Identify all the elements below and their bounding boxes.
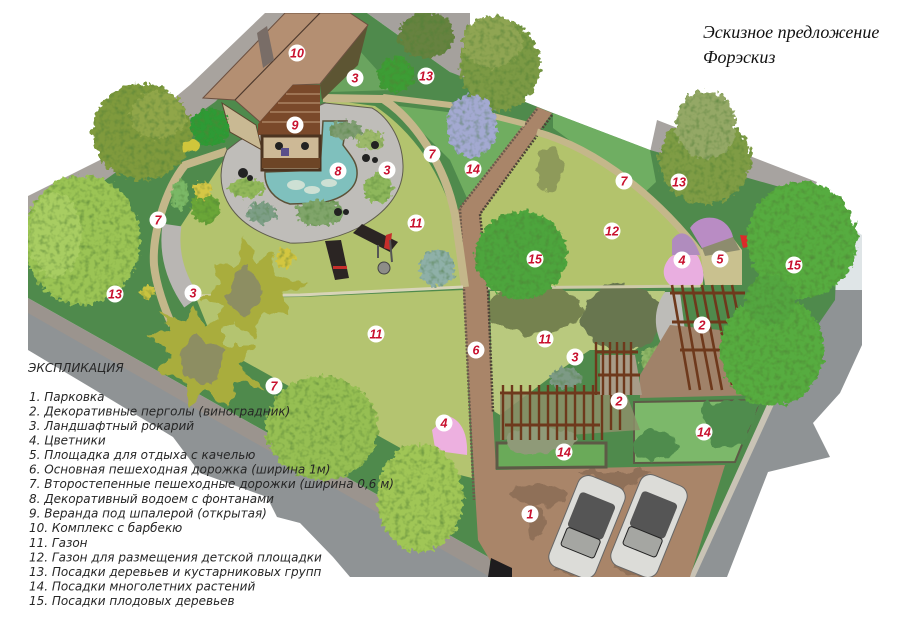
legend: 11. Газон bbox=[29, 536, 88, 550]
car right bbox=[607, 471, 691, 581]
veranda 9 bbox=[258, 85, 320, 170]
legend: 13. Посадки деревьев и кустарниковых групп bbox=[29, 565, 322, 579]
bush: green bbox=[191, 108, 229, 146]
title: Эскизное предложение bbox=[703, 22, 879, 42]
bushes: maple side bbox=[141, 248, 295, 299]
house dark side bbox=[320, 25, 368, 100]
tree: maple bbox=[147, 235, 310, 410]
water lilies bbox=[287, 179, 337, 194]
number markers: 3 bbox=[352, 72, 359, 86]
tree: lower right bbox=[377, 444, 463, 552]
path edging bbox=[460, 109, 552, 500]
number markers: 9 bbox=[292, 118, 299, 132]
legend: 6. Основная пешеходная дорожка (ширина 1м) bbox=[29, 462, 330, 476]
legend: 1. Парковка bbox=[29, 390, 105, 404]
rock garden paving bbox=[221, 103, 403, 243]
plant by rockery 3 bbox=[550, 367, 582, 389]
wall: upper left boundary bbox=[28, 13, 284, 216]
number markers: 7 bbox=[271, 380, 279, 394]
number markers: 6 bbox=[473, 344, 481, 358]
tree shadows on lawn bbox=[487, 148, 662, 352]
gate bbox=[488, 558, 512, 577]
number markers: 11 bbox=[410, 216, 423, 230]
legend bbox=[27, 361, 394, 608]
number markers: 7 bbox=[155, 214, 163, 228]
tree 15 centre bbox=[475, 211, 567, 299]
panel: lawn 11 lower bbox=[196, 290, 472, 478]
wall: lower left boundary bbox=[28, 298, 490, 577]
chimney bbox=[257, 26, 274, 68]
number markers: 7 bbox=[429, 148, 437, 162]
legend: 7. Второстепенные пешеходные дорожки (ширина 0,6 м) bbox=[29, 477, 394, 491]
number markers: 15 bbox=[528, 252, 543, 266]
main path 6 bbox=[458, 107, 725, 577]
roof 10 bbox=[203, 13, 368, 122]
number markers: 13 bbox=[419, 70, 433, 84]
legend: 10. Комплекс с барбекю bbox=[29, 521, 182, 535]
number markers: 7 bbox=[621, 174, 629, 188]
legend: 15. Посадки плодовых деревьев bbox=[29, 594, 235, 608]
number markers: 2 bbox=[615, 394, 623, 408]
cast shadow lower left bbox=[28, 306, 490, 577]
bed 14 right bbox=[633, 400, 760, 463]
panel: lawn 11 right bbox=[490, 291, 665, 415]
number markers: 14 bbox=[557, 446, 571, 460]
number markers: 11 bbox=[539, 332, 552, 346]
tree: left bbox=[24, 175, 140, 305]
tree: lower centre bbox=[266, 376, 378, 480]
pergola 2 right bbox=[670, 285, 752, 390]
roof ridge bbox=[235, 13, 320, 100]
number markers: 13 bbox=[108, 288, 122, 302]
road kerb bbox=[690, 405, 774, 577]
pergola 2 centre bbox=[595, 342, 642, 395]
house side wall bbox=[222, 103, 262, 150]
number markers: 13 bbox=[672, 176, 686, 190]
secondary paths 7 bbox=[154, 97, 702, 325]
black accents bbox=[238, 141, 379, 216]
wall: right boundary bbox=[650, 120, 817, 186]
legend: 8. Декоративный водоем с фонтанами bbox=[29, 492, 274, 506]
number markers: 1 bbox=[527, 508, 534, 522]
wall: upper right boundary bbox=[367, 13, 470, 82]
legend: 4. Цветники bbox=[29, 434, 106, 448]
number markers: 14 bbox=[466, 162, 480, 176]
bush: yellow bbox=[184, 138, 200, 154]
swing table bbox=[378, 240, 392, 274]
pergola 2 lower bbox=[500, 385, 640, 454]
number markers: 4 bbox=[440, 416, 448, 430]
number markers: 3 bbox=[572, 350, 579, 364]
tree: top left willow bbox=[92, 84, 192, 180]
title bbox=[703, 22, 879, 67]
bed 14 left bbox=[497, 443, 606, 468]
legend: 14. Посадки многолетних растений bbox=[29, 580, 255, 594]
number markers: 4 bbox=[678, 254, 686, 268]
pond 8 bbox=[265, 121, 357, 204]
flower beds 4 bbox=[432, 218, 733, 455]
panel: lawn 11 upper bbox=[172, 100, 466, 296]
car left bbox=[545, 472, 629, 582]
number markers: 10 bbox=[290, 46, 304, 60]
panel: light green beds bbox=[330, 52, 656, 198]
panel: lawn 12 bbox=[480, 135, 703, 287]
bush: grey blue bbox=[419, 250, 455, 286]
tree: right willow bbox=[659, 91, 751, 204]
tree: top dark bbox=[398, 12, 454, 58]
number markers: 12 bbox=[605, 224, 619, 238]
number markers: 5 bbox=[717, 252, 725, 266]
legend: 2. Декоративные перголы (виноградник) bbox=[29, 404, 290, 418]
number markers: 15 bbox=[787, 258, 802, 272]
number markers bbox=[106, 44, 802, 522]
bush: top green bbox=[378, 57, 414, 93]
rock garden right bbox=[638, 292, 684, 368]
legend: ЭКСПЛИКАЦИЯ bbox=[27, 361, 124, 375]
number markers: 3 bbox=[384, 164, 391, 178]
bushes: left walkway bbox=[172, 179, 220, 223]
title: Форэскиз bbox=[703, 47, 775, 67]
number markers: 14 bbox=[697, 426, 711, 440]
grey walkway bbox=[171, 225, 192, 302]
number markers: 11 bbox=[370, 328, 383, 342]
ground under pergolas bbox=[640, 325, 742, 398]
legend: 3. Ландшафтный рокарий bbox=[29, 419, 194, 433]
parking shadows bbox=[512, 470, 650, 577]
number markers: 3 bbox=[190, 286, 197, 300]
legend: 9. Веранда под шпалерой (открытая) bbox=[29, 506, 267, 520]
playground 5 bbox=[700, 235, 752, 285]
number markers: 8 bbox=[335, 164, 342, 178]
legend: 12. Газон для размещения детской площадки bbox=[29, 550, 322, 564]
tree: top centre bbox=[460, 16, 540, 111]
light background at right edge bbox=[836, 232, 862, 290]
legend: 5. Площадка для отдыха с качелью bbox=[29, 448, 255, 462]
number markers: 2 bbox=[698, 318, 706, 332]
loungers bbox=[325, 224, 398, 280]
rock garden plants bbox=[229, 121, 393, 226]
tree 15 right bbox=[720, 182, 857, 406]
road shadow right bbox=[690, 290, 862, 577]
bush: blue bbox=[446, 95, 498, 157]
